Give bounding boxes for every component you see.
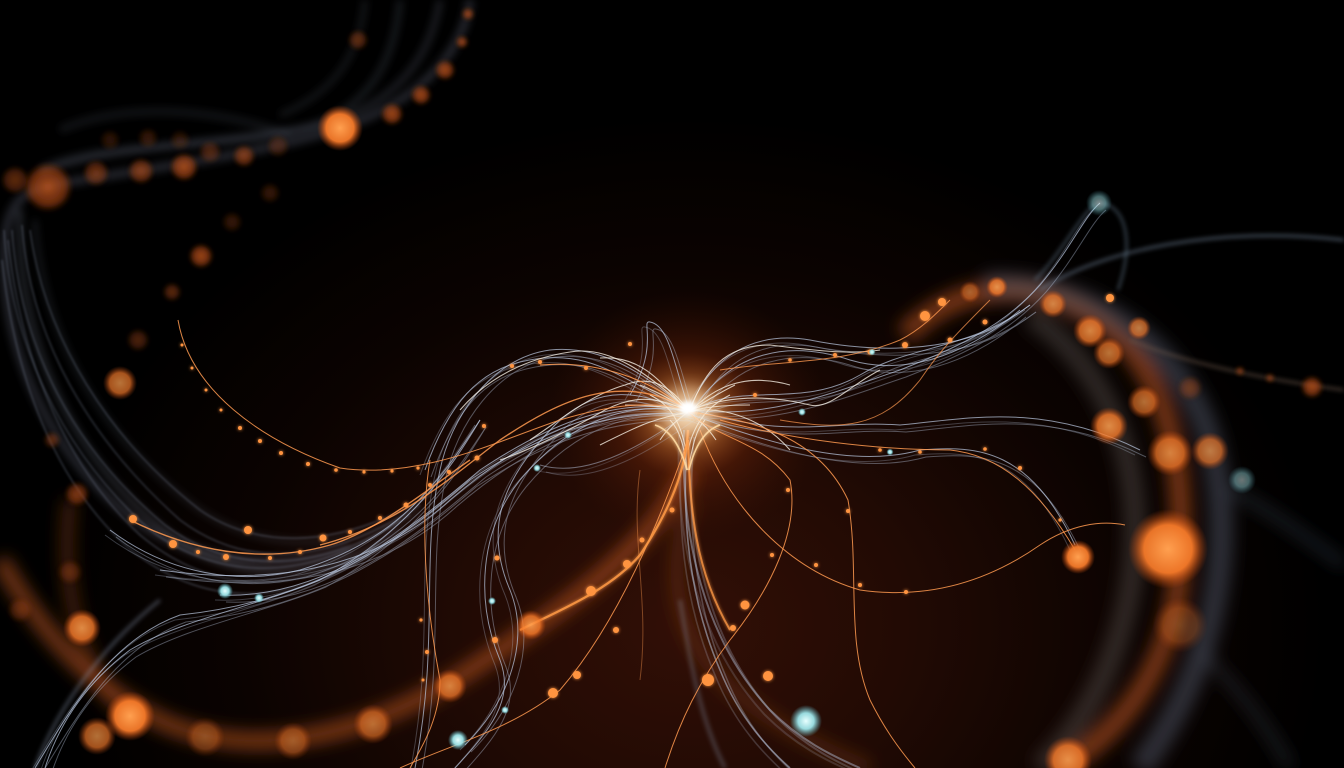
fine fibres: blue-white (35, 203, 1140, 768)
fine fibres: second offset copy (30, 208, 1135, 768)
soft strands: upper right and lower (35, 203, 1344, 768)
thick orange trunk (520, 425, 730, 630)
central burst (660, 388, 716, 436)
left fibre bundle (2, 225, 430, 594)
cyan nodes (217, 190, 1256, 750)
fine fibres: offset copy (41, 210, 1146, 768)
fine fibres: white core (460, 345, 880, 470)
small orange beads (129, 294, 1114, 698)
blurred rings: right (905, 285, 1344, 768)
large glowing orange orbs (63, 105, 1229, 768)
blurred orange band: lower left (0, 470, 870, 768)
fine fibres: orange (130, 300, 1125, 768)
blurred orange beads: top-left strand (1, 8, 1323, 622)
central glow (548, 290, 828, 540)
blurred strands: top left and left loop (4, 0, 470, 572)
